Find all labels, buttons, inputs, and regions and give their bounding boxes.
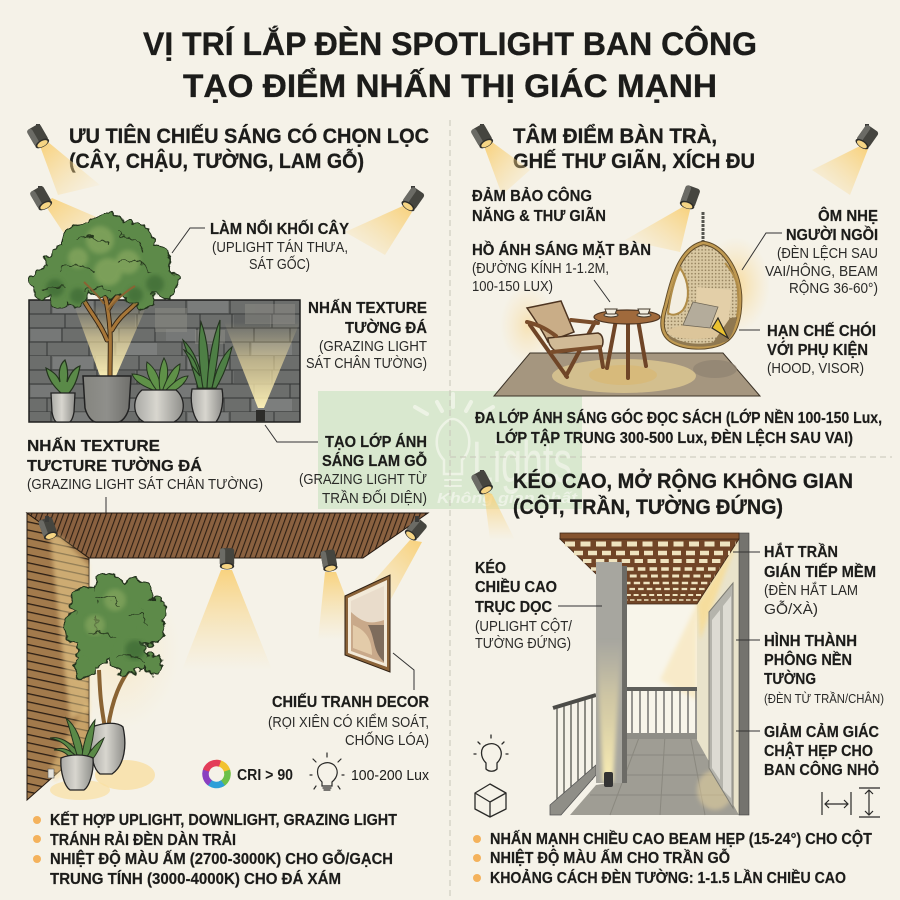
bullet list: left: KẾT HỢP UPLIGHT, DOWNLIGHT, GRAZING LIGHT <box>50 810 397 829</box>
callout: function and relax: ĐẢM BẢO CÔNG <box>472 186 592 205</box>
small wall lamp <box>48 769 54 778</box>
callout: seated person: (ĐÈN LỆCH SAU <box>777 245 878 262</box>
bullet list: left: NHIỆT ĐỘ MÀU ẤM (2700-3000K) CHO GỖ/GẠCH <box>50 849 393 868</box>
floor lamp <box>604 772 613 787</box>
callout: ceiling wash <box>733 542 876 618</box>
bullet list: right: KHOẢNG CÁCH ĐÈN TƯỜNG: 1-1.5 LẦN CHIỀU CAO <box>490 868 846 887</box>
hanging rattan swing <box>662 212 740 347</box>
rug with pools of light <box>494 237 770 396</box>
callout: vertical axis: TƯỜNG ĐỨNG) <box>475 635 571 652</box>
callout: table light pool <box>472 240 651 302</box>
heading: raise height: KÉO CAO, MỞ RỘNG KHÔNG GIAN <box>513 469 853 493</box>
trellis ceiling <box>560 533 739 604</box>
callout: stone texture: NHẤN TEXTURE <box>308 298 427 317</box>
plant: tall spiky <box>183 320 232 388</box>
pot: large grey <box>83 376 131 422</box>
tree: corner <box>65 575 167 728</box>
heading: raise height <box>513 469 853 519</box>
floor <box>570 735 739 815</box>
callout: stone texture: SÁT CHÂN TƯỜNG) <box>306 355 427 372</box>
heading: selective lighting <box>69 124 429 173</box>
wall light beams <box>74 305 300 422</box>
callout: seated person: ÔM NHẸ <box>818 206 878 225</box>
callout: decor painting: (RỌI XIÊN CÓ KIỂM SOÁT, <box>268 713 429 731</box>
callout: tree mass <box>172 218 349 273</box>
callout: vertical axis: TRỤC DỌC <box>475 599 552 616</box>
heading: tea table <box>513 124 755 173</box>
lux label: 100-200 Lux <box>351 767 429 784</box>
vertical and horizontal dashed dividers <box>450 120 892 900</box>
bullet list: right: NHIỆT ĐỘ MÀU ẤM CHO TRẦN GỖ <box>490 848 730 867</box>
bullet list: left: TRÁNH RẢI ĐÈN DÀN TRẢI <box>50 830 236 849</box>
title: VỊ TRÍ LẮP ĐÈN SPOTLIGHT BAN CÔNG <box>143 26 757 62</box>
callout: seated person: VAI/HÔNG, BEAM <box>765 263 878 280</box>
callout: small balcony <box>736 722 879 779</box>
back railing <box>627 687 699 739</box>
icon: spotlight beams upper <box>26 123 425 255</box>
callout: stone texture: (GRAZING LIGHT <box>319 339 427 355</box>
callout: wall backdrop: PHÔNG NỀN <box>764 650 852 669</box>
panel: tea table and swing <box>470 123 882 447</box>
callout: seated person: RỘNG 36-60°) <box>789 280 878 297</box>
callout: small balcony: GIẢM CẢM GIÁC <box>764 722 879 741</box>
callout: small balcony: CHẬT HẸP CHO <box>764 741 873 760</box>
wood ceiling and wall <box>27 513 428 800</box>
plant: round pot <box>132 358 188 422</box>
callout: tucture wall: NHẤN TEXTURE <box>27 436 160 455</box>
callout: function and relax <box>472 186 606 225</box>
potted plants <box>46 320 232 422</box>
callout: wall backdrop <box>736 631 884 706</box>
wall post <box>739 533 749 815</box>
callout: ceiling wash: GỖ/XÀ) <box>764 600 818 618</box>
callout: small balcony: BAN CÔNG NHỎ <box>764 760 879 779</box>
bullet list: right: NHẤN MẠNH CHIỀU CAO BEAM HẸP (15-24°) CHO CỘT <box>490 829 872 848</box>
callout: wood louver layer: TẠO LỚP ÁNH <box>325 432 427 451</box>
callout: table light pool: HỒ ÁNH SÁNG MẶT BÀN <box>472 240 651 259</box>
armchair <box>527 301 603 377</box>
pot: tall corner <box>90 723 125 774</box>
callout: tree mass: LÀM NỔI KHỐI CÂY <box>210 218 349 238</box>
heading: tea table: TÂM ĐIỂM BÀN TRÀ, <box>513 124 717 148</box>
callout: wood louver layer: TRẦN ĐỐI DIỆN) <box>322 489 427 507</box>
callout: wall backdrop: (ĐÈN TỪ TRẦN/CHÂN) <box>764 691 884 706</box>
callout: glare limit <box>739 321 876 377</box>
cups <box>604 309 651 317</box>
bullet list: left <box>33 810 397 888</box>
callout: tucture wall: TƯCTURE TƯỜNG ĐÁ <box>27 456 202 475</box>
plant: small left <box>46 360 80 422</box>
CRI label: CRI > 90 <box>237 767 293 784</box>
title <box>143 26 757 104</box>
callout: vertical axis: KÉO <box>475 558 506 577</box>
left railing <box>550 695 596 815</box>
callout: table light pool: (ĐƯỜNG KÍNH 1-1.2M, <box>472 260 609 277</box>
callout: decor painting: CHỐNG LÓA) <box>345 731 429 749</box>
callout: stone texture: TƯỜNG ĐÁ <box>345 318 427 337</box>
callout: vertical axis: (UPLIGHT CỘT/ <box>475 618 573 635</box>
icon: cube <box>475 784 506 817</box>
concrete column <box>596 562 622 783</box>
callout: vertical axis: CHIỀU CAO <box>475 577 557 596</box>
spotlights and beams <box>470 123 879 252</box>
callout: glare limit: HẠN CHẾ CHÓI <box>767 321 876 340</box>
callout: decor painting: CHIẾU TRANH DECOR <box>272 692 429 711</box>
heading: selective lighting: (CÂY, CHẬU, TƯỜNG, LAM GỖ) <box>69 149 364 173</box>
spotlights and beams on ceiling <box>38 516 428 670</box>
spotlight with beam <box>470 469 515 540</box>
plants in corner <box>48 570 180 800</box>
callout: table light pool: 100-150 LUX) <box>472 279 553 295</box>
callout: vertical axis <box>475 558 602 652</box>
stone wall <box>29 300 300 422</box>
callout: tree mass: (UPLIGHT TÁN THƯA, <box>212 239 348 256</box>
icon: light bulb lux <box>310 753 344 790</box>
balcony illustration <box>550 533 749 815</box>
callout: tucture wall <box>27 436 263 513</box>
callout: wall backdrop: HÌNH THÀNH <box>764 631 857 650</box>
panel: selective lighting <box>26 123 429 888</box>
title: TẠO ĐIỂM NHẤN THỊ GIÁC MẠNH <box>183 68 717 104</box>
callout: wood louver layer <box>265 425 427 507</box>
tree with canopy <box>32 214 177 376</box>
watermark panel: Lights <box>472 430 572 495</box>
icon: CRI colour ring <box>201 759 232 789</box>
heading: raise height: (CỘT, TRẦN, TƯỜNG ĐỨNG) <box>513 495 783 519</box>
callout: seated person <box>742 206 878 297</box>
callout: stone texture <box>306 298 427 372</box>
icon: width and height arrows <box>822 788 880 817</box>
callout: ceiling wash: HẮT TRẦN <box>764 542 838 561</box>
callout: decor painting <box>268 653 429 749</box>
panel: raise height <box>470 469 884 887</box>
icon: bulb <box>474 735 508 771</box>
callout: ceiling wash: GIÁN TIẾP MỀM <box>764 562 876 581</box>
heading: tea table: GHẾ THƯ GIÃN, XÍCH ĐU <box>513 150 755 173</box>
callout: glare limit: VỚI PHỤ KIỆN <box>767 340 868 359</box>
plant: spiky corner <box>50 718 104 762</box>
callout: wood louver layer: (GRAZING LIGHT TỪ <box>299 471 427 488</box>
watermark panel <box>318 391 582 509</box>
heading: selective lighting: ƯU TIÊN CHIẾU SÁNG CÓ CHỌN LỌC <box>69 124 429 148</box>
text: layered reading corner <box>475 408 882 447</box>
callout: glare limit: (HOOD, VISOR) <box>767 361 864 377</box>
callout: tucture wall: (GRAZING LIGHT SÁT CHÂN TƯỜNG) <box>27 476 263 493</box>
watermark panel: Không gian nhất <box>437 490 578 507</box>
callout: ceiling wash: (ĐÈN HẮT LAM <box>764 581 858 599</box>
framed painting <box>345 575 390 672</box>
callout: function and relax: NĂNG & THƯ GIÃN <box>472 205 606 225</box>
text: layered reading corner: LỚP TẬP TRUNG 300-500 Lux, ĐÈN LỆCH SAU VAI) <box>496 428 853 447</box>
back opening <box>627 604 699 736</box>
callout: seated person: NGƯỜI NGỒI <box>786 225 878 244</box>
tea table <box>594 309 660 378</box>
callout: wood louver layer: SÁNG LAM GỖ <box>322 451 427 470</box>
right wall with door <box>697 539 739 815</box>
bullet list: right <box>473 829 872 887</box>
callout: wall backdrop: TƯỜNG <box>764 669 816 688</box>
bullet list: left: TRUNG TÍNH (3000-4000K) CHO ĐÁ XÁM <box>50 869 341 888</box>
callout: tree mass: SÁT GỐC) <box>249 255 310 273</box>
